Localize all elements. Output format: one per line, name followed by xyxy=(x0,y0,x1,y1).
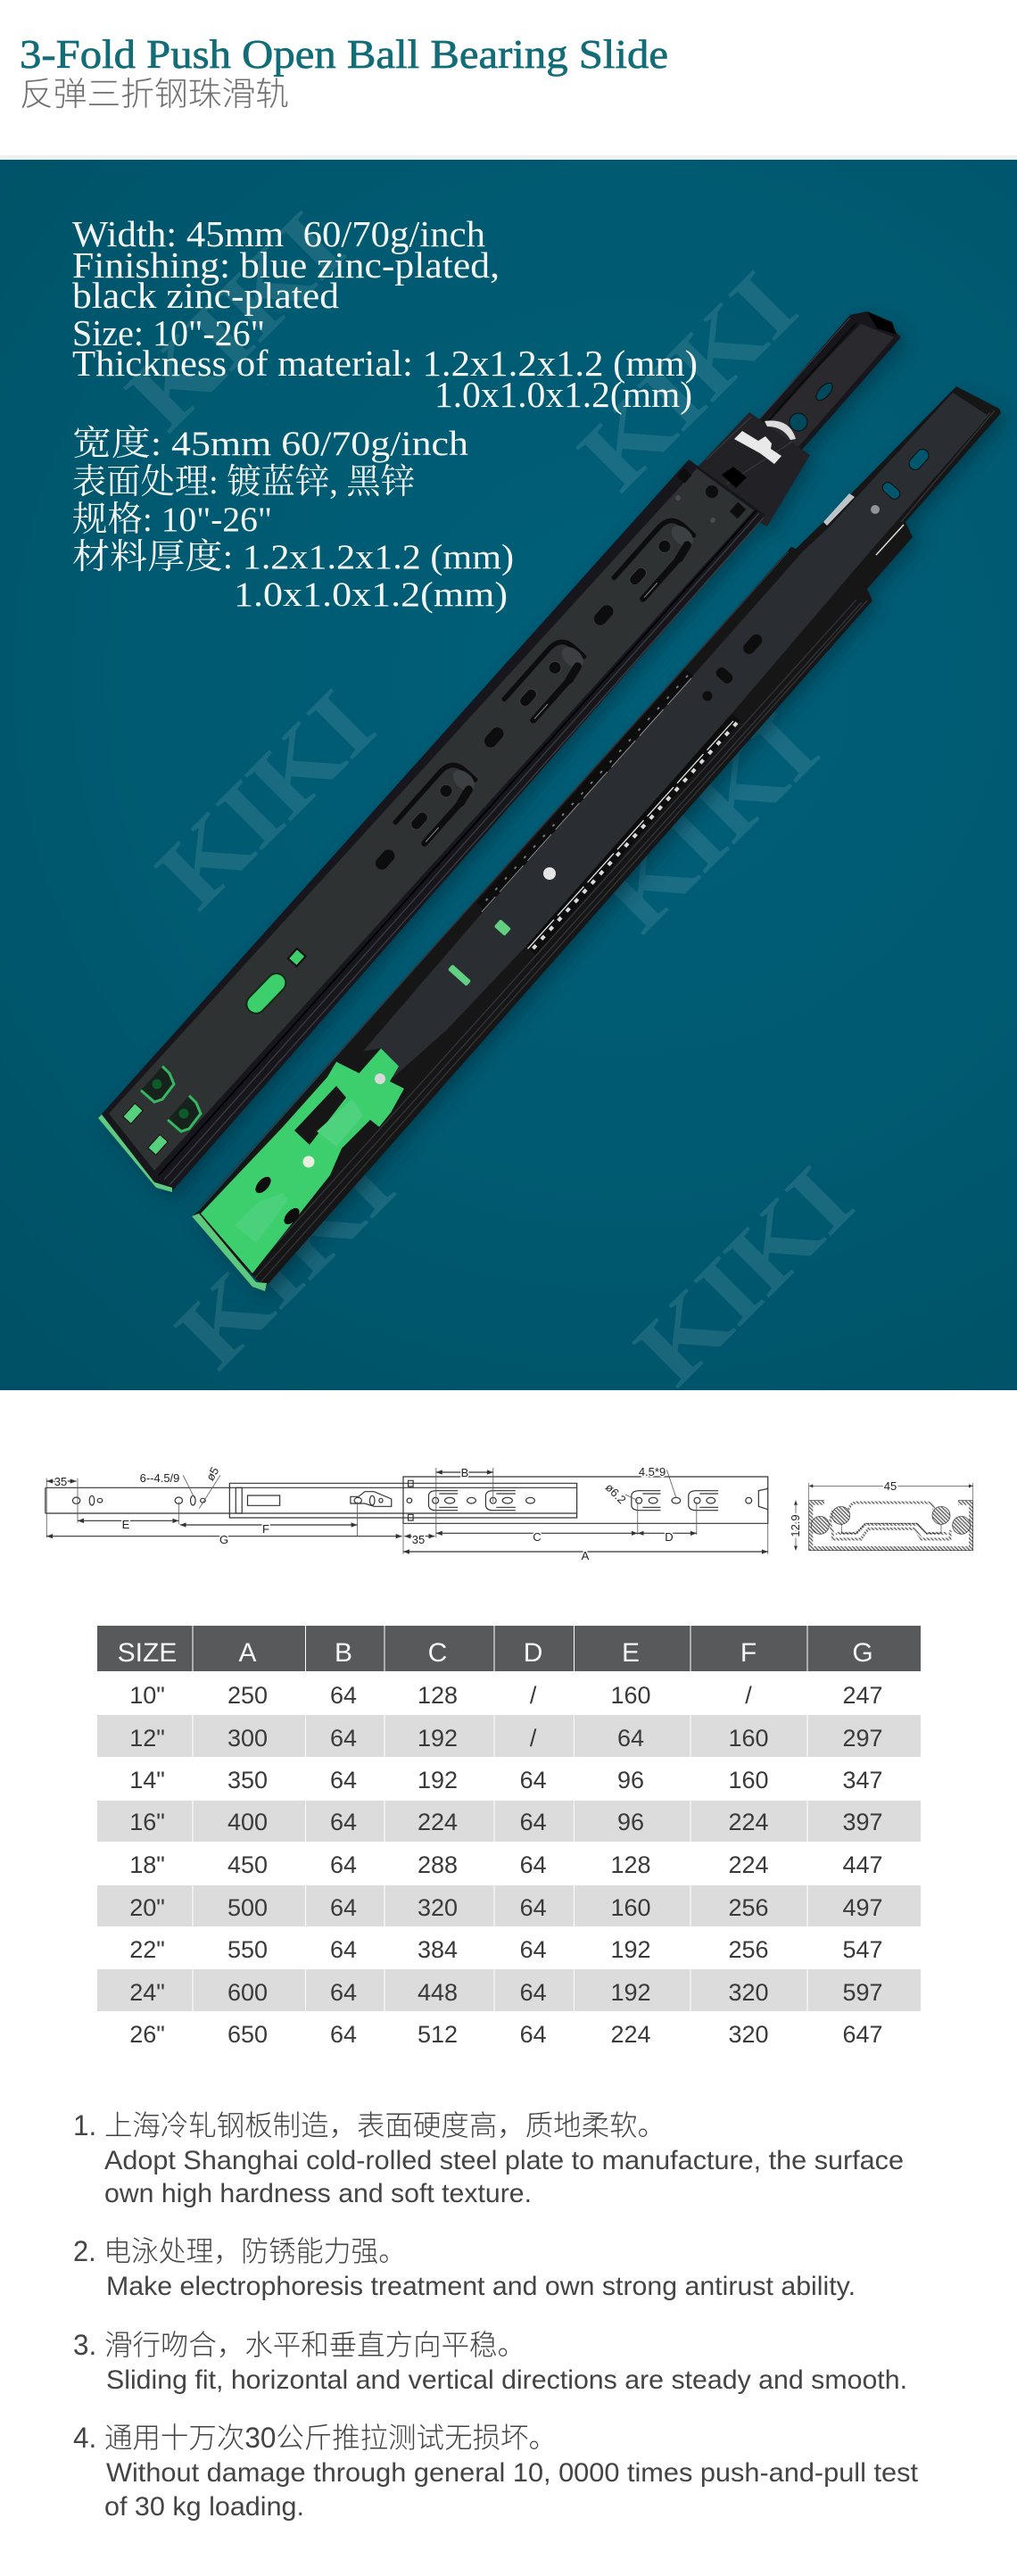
table rows: 450 xyxy=(227,1851,268,1878)
feature 4: 4. 通用十万次30公斤推拉测试无损坏。 xyxy=(73,2422,557,2454)
watermark: KIKI logos: KIKI xyxy=(558,251,818,511)
rail body xyxy=(192,386,1001,1288)
outer rail xyxy=(98,460,765,1192)
table rows: 64 xyxy=(520,1767,547,1793)
table rows: 22" xyxy=(129,1936,165,1963)
table rows: 320 xyxy=(728,1979,769,2006)
table rows: 300 xyxy=(227,1725,268,1752)
watermark: KIKI logos: KIKI xyxy=(155,1129,416,1389)
table rows: 497 xyxy=(842,1894,883,1921)
table rows: 64 xyxy=(330,1809,357,1835)
table rows: 547 xyxy=(842,1936,883,1963)
table rows: 160 xyxy=(728,1725,769,1752)
cross-section outer channel xyxy=(811,1503,971,1548)
table rows: 64 xyxy=(330,1682,357,1709)
size table xyxy=(97,1626,921,2054)
panel: teal product band xyxy=(0,160,1017,1406)
table rows: 64 xyxy=(330,1851,357,1878)
table rows: 192 xyxy=(418,1767,458,1793)
table rows: 16" xyxy=(129,1809,165,1835)
feature 1: Adopt Shanghai cold-rolled steel plate to manufacture, the surface xyxy=(104,2146,904,2175)
green push-open unit xyxy=(192,1048,404,1291)
divider strip xyxy=(0,155,1017,160)
feature 2: 2. 电泳处理，防锈能力强。 xyxy=(73,2235,406,2267)
table rows: 64 xyxy=(520,1936,547,1963)
watermark: KIKI logos xyxy=(105,191,874,1406)
table rows: 64 xyxy=(520,1809,547,1835)
table rows: 160 xyxy=(610,1894,651,1921)
middle rail xyxy=(687,412,810,526)
feature list xyxy=(73,2109,919,2522)
dimension labels: G xyxy=(219,1533,228,1546)
table rows: 247 xyxy=(842,1682,883,1709)
table rows: 500 xyxy=(227,1894,268,1921)
table rows: 512 xyxy=(418,2021,458,2048)
dimension labels xyxy=(54,1464,674,1562)
table rows: 128 xyxy=(610,1851,651,1878)
table rows: 64 xyxy=(330,2021,357,2048)
dimension labels: 4.5*9 xyxy=(639,1465,666,1479)
ball bearing strips xyxy=(476,669,740,955)
slide 1: assembled rail with mounting holes xyxy=(98,311,901,1192)
table rows: 550 xyxy=(227,1936,268,1963)
feature 1 xyxy=(73,2109,904,2208)
watermark: KIKI logos: KIKI xyxy=(136,669,396,930)
table rows: 96 xyxy=(617,1767,644,1793)
feature 3: Sliding fit, horizontal and vertical directions are steady and smooth. xyxy=(106,2365,907,2395)
specification text: Chinese xyxy=(72,425,514,614)
green inserts xyxy=(243,970,290,1017)
table header: E xyxy=(622,1638,640,1668)
specification text: Chinese: 表面处理: 镀蓝锌, 黑锌 xyxy=(72,463,415,501)
table rows: 297 xyxy=(842,1725,883,1752)
table rows: 64 xyxy=(520,1851,547,1878)
table rows: 64 xyxy=(617,1725,644,1752)
feature 2: Make electrophoresis treatment and own strong antirust ability. xyxy=(106,2272,856,2301)
table rows: 250 xyxy=(227,1682,268,1709)
table rows: 224 xyxy=(610,2021,651,2048)
table rows: 350 xyxy=(227,1767,268,1793)
table rows: 64 xyxy=(520,1894,547,1921)
table rows: 10" xyxy=(129,1682,165,1709)
header: white title area xyxy=(0,0,1017,155)
table rows: 650 xyxy=(227,2021,268,2048)
feature 3: 3. 滑行吻合，水平和垂直方向平稳。 xyxy=(73,2329,525,2361)
technical drawing: cross-section profile xyxy=(789,1479,973,1551)
table header: C xyxy=(428,1638,447,1668)
table rows xyxy=(129,1682,883,2048)
table rows: 647 xyxy=(842,2021,883,2048)
flat inner member xyxy=(363,393,988,1078)
dimension labels: ø5 xyxy=(203,1464,221,1483)
table rows: 224 xyxy=(418,1809,458,1835)
dimension labels: B xyxy=(461,1466,468,1479)
table rows: 18" xyxy=(129,1851,165,1878)
specification text: English: Size: 10"-26" xyxy=(72,312,265,353)
silver latch xyxy=(823,493,855,526)
table rows: 160 xyxy=(728,1767,769,1793)
feature 1: own high hardness and soft texture. xyxy=(104,2179,532,2208)
table rows: / xyxy=(745,1682,752,1709)
table header: SIZE xyxy=(118,1638,177,1668)
dimension labels: ø6.2 xyxy=(603,1480,629,1506)
table rows: 347 xyxy=(842,1767,883,1793)
dimension labels: A xyxy=(582,1549,590,1562)
feature 3 xyxy=(73,2329,907,2395)
cross-section labels: 45 xyxy=(884,1479,897,1493)
table header: A xyxy=(238,1638,257,1668)
dimension labels: F xyxy=(262,1522,269,1536)
table rows: 288 xyxy=(418,1851,458,1878)
table header: F xyxy=(740,1638,757,1668)
table rows: 600 xyxy=(227,1979,268,2006)
table rows: 64 xyxy=(330,1767,357,1793)
table rows: 384 xyxy=(418,1936,458,1963)
green markers xyxy=(494,919,511,936)
rail grooves xyxy=(200,410,995,1282)
table rows: 128 xyxy=(418,1682,458,1709)
dimension labels: C xyxy=(533,1530,542,1544)
cross-section profile bands xyxy=(831,1503,950,1539)
table rows: 96 xyxy=(617,1809,644,1835)
table rows: 320 xyxy=(728,2021,769,2048)
rail holes xyxy=(906,447,931,472)
specification text: English: black zinc-plated xyxy=(72,275,339,316)
cross-section ball bearings xyxy=(811,1506,971,1534)
technical drawing: side elevation with dimensions xyxy=(45,1464,768,1562)
table rows: 597 xyxy=(842,1979,883,2006)
specification text: Chinese: 宽度: 45mm 60/70g/inch xyxy=(72,425,468,463)
table header: B xyxy=(335,1638,352,1668)
table rows: 26" xyxy=(129,2021,165,2048)
inner rail xyxy=(748,311,901,464)
specification text: Chinese: 规格: 10"-26" xyxy=(72,501,272,539)
table rows: 64 xyxy=(520,1979,547,2006)
specification text: English: Finishing: blue zinc-plated, xyxy=(72,244,500,286)
table rows: 397 xyxy=(842,1809,883,1835)
feature 2 xyxy=(73,2235,856,2301)
feature 4: of 30 kg loading. xyxy=(104,2492,304,2522)
table rows: 447 xyxy=(842,1851,883,1878)
dimension labels: 6--4.5/9 xyxy=(140,1471,179,1485)
table rows: 64 xyxy=(330,1725,357,1752)
feature 1: 1. 上海冷轧钢板制造，表面硬度高，质地柔软。 xyxy=(73,2109,666,2141)
table rows: 224 xyxy=(728,1851,769,1878)
table rows: / xyxy=(530,1682,537,1709)
table rows: 20" xyxy=(129,1894,165,1921)
table rows: 400 xyxy=(227,1809,268,1835)
subtitle: 反弹三折钢珠滑轨 xyxy=(20,76,289,112)
table rows: 64 xyxy=(520,2021,547,2048)
table rows: 320 xyxy=(418,1894,458,1921)
table header xyxy=(97,1626,921,1671)
table rows: 224 xyxy=(728,1809,769,1835)
slide 2: rail with ball bearings and green push-open unit xyxy=(192,386,1001,1291)
feature 4 xyxy=(73,2422,919,2522)
table rows: 192 xyxy=(610,1936,651,1963)
dimension labels: 35 xyxy=(412,1533,425,1546)
table rows: 64 xyxy=(330,1979,357,2006)
table rows: 12" xyxy=(129,1725,165,1752)
specification text: English: Thickness of material: 1.2x1.2x1.2 (mm) xyxy=(72,343,698,384)
table rows: 14" xyxy=(129,1767,165,1793)
specification text: English: 1.0x1.0x1.2(mm) xyxy=(434,374,692,415)
dimension labels: 35 xyxy=(54,1475,67,1488)
specification text: English: Width: 45mm 60/70g/inch xyxy=(72,213,485,254)
table rows: 160 xyxy=(610,1682,651,1709)
watermark: KIKI logos: KIKI xyxy=(579,692,839,953)
dimension labels: E xyxy=(122,1518,130,1531)
table rows: 192 xyxy=(610,1979,651,2006)
dimension labels: D xyxy=(665,1530,674,1544)
watermark: KIKI logos: KIKI xyxy=(614,1146,874,1406)
feature 4: Without damage through general 10, 0000 times push-and-pull test xyxy=(106,2458,919,2488)
table header: D xyxy=(524,1638,542,1668)
table rows: 256 xyxy=(728,1894,769,1921)
table rows: 256 xyxy=(728,1936,769,1963)
table rows: 64 xyxy=(330,1894,357,1921)
cross-section labels: 12.9 xyxy=(789,1514,802,1537)
specification text: Chinese: 材料厚度: 1.2x1.2x1.2 (mm) xyxy=(72,538,514,576)
table row stripes xyxy=(97,1715,921,2011)
cross-section labels xyxy=(789,1479,897,1537)
watermark: KIKI logos: KIKI xyxy=(105,191,366,451)
title: 3-Fold Push Open Ball Bearing Slide xyxy=(20,31,668,77)
table rows: 24" xyxy=(129,1979,165,2006)
table rows: / xyxy=(530,1725,537,1752)
table rows: 192 xyxy=(418,1725,458,1752)
plate holes xyxy=(706,485,718,498)
specification text: English xyxy=(72,213,698,415)
specification text: Chinese: 1.0x1.0x1.2(mm) xyxy=(234,576,508,614)
table rows: 64 xyxy=(330,1936,357,1963)
table header: G xyxy=(852,1638,873,1668)
table rows: 448 xyxy=(418,1979,458,2006)
